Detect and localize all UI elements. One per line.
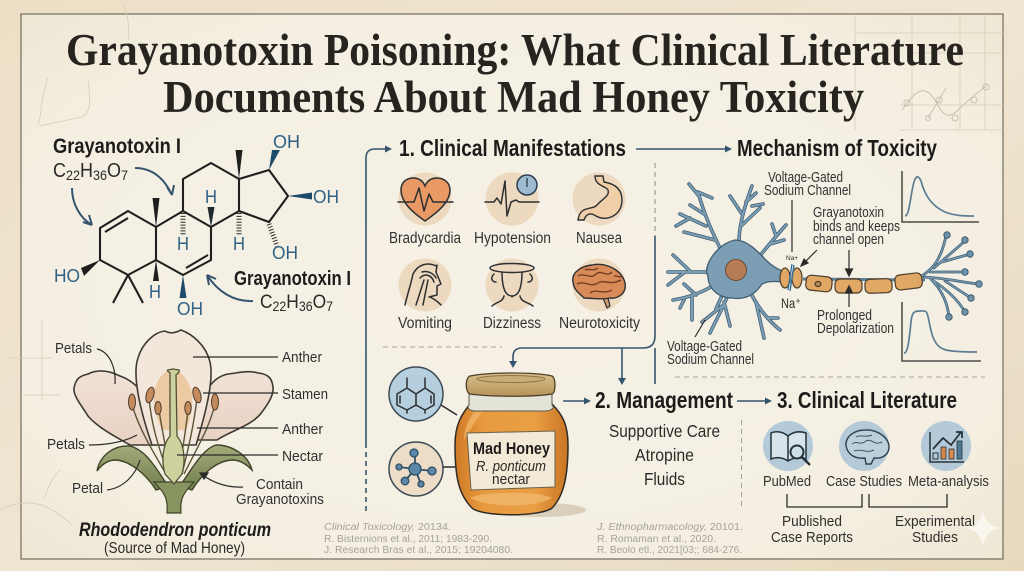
citations left: J. Research Bras et al., 2015; 19204080. [324, 544, 513, 556]
flower labels: Grayanotoxins [236, 492, 324, 508]
label: Grayanotoxin I lower: 7 [326, 299, 333, 314]
sketch graph, top right [902, 84, 989, 121]
neuron leaders [695, 200, 852, 337]
icon: case studies brain [826, 421, 902, 490]
pistil and nectary [163, 369, 184, 484]
icon: hypotension: Hypotension [474, 230, 551, 247]
title: Documents About Mad Honey Toxicity [163, 72, 864, 122]
flower labels: Nectar [282, 449, 323, 465]
citations right: R. Romaman et al., 2020. [597, 533, 716, 545]
label: Grayanotoxin I top: 7 [121, 167, 128, 183]
icon: meta-analysis chart: Meta-analysis [908, 474, 989, 490]
icon: vomiting: Vomiting [398, 315, 452, 332]
atom labels: OH [177, 298, 203, 319]
management list: Atropine [635, 445, 694, 465]
citations right: R. Beolo etl., 2021[03;; 684-276. [597, 544, 742, 556]
flower caption [79, 520, 271, 557]
icon: neurotoxicity [559, 258, 640, 332]
flower caption: Rhododendron ponticum [79, 520, 271, 541]
neuron labels: Voltage-Gated [667, 339, 742, 355]
flower labels [47, 341, 328, 508]
flower labels: Stamen [282, 387, 328, 403]
icon: molecule ring [389, 367, 443, 421]
atom labels: OH [272, 242, 298, 263]
label: Grayanotoxin I top: C [53, 160, 67, 182]
heading: 2. Management: 2. Management [595, 387, 733, 413]
structure: blue wedges [180, 150, 312, 298]
neuron dendrites and soma [668, 184, 790, 338]
bracket labels: Published [782, 513, 842, 530]
management list [609, 421, 720, 489]
jar label text: Mad Honey [473, 439, 550, 458]
panel: flower [47, 330, 328, 557]
flower caption: (Source of Mad Honey) [104, 540, 245, 557]
neuron labels: binds and keeps [813, 219, 900, 235]
flower labels: Petals [47, 437, 85, 453]
neuron labels [667, 170, 900, 368]
panel: molecule [53, 131, 351, 319]
atom labels: H [233, 233, 245, 254]
jar label text [473, 439, 550, 488]
neuron labels: Voltage-Gated [768, 170, 843, 186]
panel: mad honey jar [389, 367, 586, 517]
heading: Mechanism of Toxicity: Mechanism of Toxicity [737, 135, 937, 161]
flower labels: Contain [256, 477, 303, 493]
jar neck [468, 394, 553, 411]
label: Grayanotoxin I lower: 36 [299, 299, 313, 314]
neuron labels: Grayanotoxin [813, 205, 884, 221]
jar label [467, 431, 555, 490]
flower labels: Petals [55, 341, 92, 357]
axon terminals [922, 232, 982, 320]
neuron labels: Sodium Channel [667, 352, 754, 368]
sparkle [965, 510, 1001, 547]
bracket labels: Case Reports [771, 529, 853, 546]
atom labels: H [177, 233, 189, 254]
bracket labels [771, 513, 975, 546]
icon: molecule network [389, 442, 443, 496]
jar lid [466, 373, 555, 396]
heading: 3. Clinical Literature: 3. Clinical Literature [777, 387, 957, 413]
bracket labels: Studies [912, 529, 958, 546]
citations left: Clinical Toxicology, 20134. [324, 521, 451, 533]
petal centre glow [154, 368, 192, 430]
label: Grayanotoxin I top: Grayanotoxin I [53, 135, 181, 158]
jar shadow [494, 503, 586, 517]
panel: literature icons [763, 421, 989, 546]
anthers [128, 386, 218, 414]
neuron labels: Na⁺ [781, 295, 801, 311]
bracket labels: Experimental [895, 513, 975, 530]
jar label text: nectar [492, 471, 530, 488]
icon: dizziness: Dizziness [483, 315, 541, 332]
citations right: J. Ethnopharmacology, 20101. [596, 521, 743, 533]
jar highlight [464, 412, 552, 506]
citations right [596, 521, 743, 556]
sepals [97, 445, 252, 490]
curved arrows [72, 168, 253, 301]
icon: dizziness [483, 258, 541, 332]
petals [74, 330, 273, 445]
icon: meta-analysis chart [908, 421, 989, 490]
icon: bradycardia: Bradycardia [389, 230, 461, 247]
icon: PubMed book [763, 421, 813, 490]
label: Grayanotoxin I lower [234, 268, 351, 314]
brackets [787, 494, 947, 507]
myelinated axon [780, 268, 925, 293]
structure: hashed bonds [183, 213, 277, 246]
atom labels: HO [54, 265, 80, 286]
label: Grayanotoxin I top: O [107, 160, 121, 182]
title: Grayanotoxin Poisoning: What Clinical Literature [66, 25, 964, 75]
label: Grayanotoxin I top: H [80, 160, 93, 182]
icon: case studies brain: Case Studies [826, 474, 902, 490]
lid rim [477, 376, 545, 382]
flower leader lines [89, 349, 278, 490]
chart: normal action potential [902, 171, 979, 222]
stem and base [154, 482, 194, 513]
atom labels: OH [313, 186, 339, 207]
chart: prolonged action potential [902, 302, 981, 361]
icon: vomiting [398, 258, 452, 332]
flower labels: Anther [282, 422, 323, 438]
jar label text: R. ponticum [476, 458, 546, 475]
jar body [455, 404, 568, 515]
atom labels: OH [273, 131, 300, 152]
label: Grayanotoxin I top: 22 [66, 167, 80, 183]
icon: nausea [572, 172, 626, 247]
icon: PubMed book: PubMed [763, 474, 811, 490]
structure: stereo wedges [81, 150, 242, 281]
icon: hypotension [474, 172, 551, 247]
panel: symptom icons [389, 172, 640, 332]
management list: Fluids [644, 469, 685, 489]
management list: Supportive Care [609, 421, 720, 441]
icon: bradycardia [389, 172, 461, 247]
flower labels: Petal [72, 481, 103, 497]
flow connectors [366, 146, 985, 513]
citations left: R. Bisternions et al., 2011; 1983-290. [324, 533, 492, 545]
atom labels: H [205, 186, 217, 207]
title [66, 25, 964, 122]
label: Grayanotoxin I top: 36 [93, 167, 107, 183]
flower labels: Anther [282, 350, 322, 366]
neuron labels: Prolonged [817, 308, 872, 324]
neuron labels: Na+ [786, 255, 798, 262]
neuron labels: Depolarization [817, 321, 894, 337]
panel: neuron diagram [667, 170, 982, 368]
icon: neurotoxicity: Neurotoxicity [559, 315, 640, 332]
label: Grayanotoxin I lower: C [260, 292, 274, 313]
label: Grayanotoxin I lower: O [313, 292, 326, 313]
neuron labels: channel open [813, 232, 884, 248]
neuron labels: Sodium Channel [764, 183, 851, 199]
citations left [324, 521, 513, 556]
atom labels [54, 131, 339, 319]
label: Grayanotoxin I lower: H [286, 292, 299, 313]
label: Grayanotoxin I top [53, 135, 181, 183]
connector lines [441, 405, 457, 467]
label: Grayanotoxin I lower: Grayanotoxin I [234, 268, 351, 290]
label: Grayanotoxin I lower: 22 [273, 299, 286, 314]
structure: ring skeleton [100, 163, 288, 303]
atom labels: H [149, 281, 161, 302]
icon: nausea: Nausea [576, 230, 622, 247]
stamens [133, 398, 214, 474]
sodium channel marker [788, 264, 794, 291]
heading: 1. Clinical Manifestations: 1. Clinical Manifestations [399, 135, 626, 161]
